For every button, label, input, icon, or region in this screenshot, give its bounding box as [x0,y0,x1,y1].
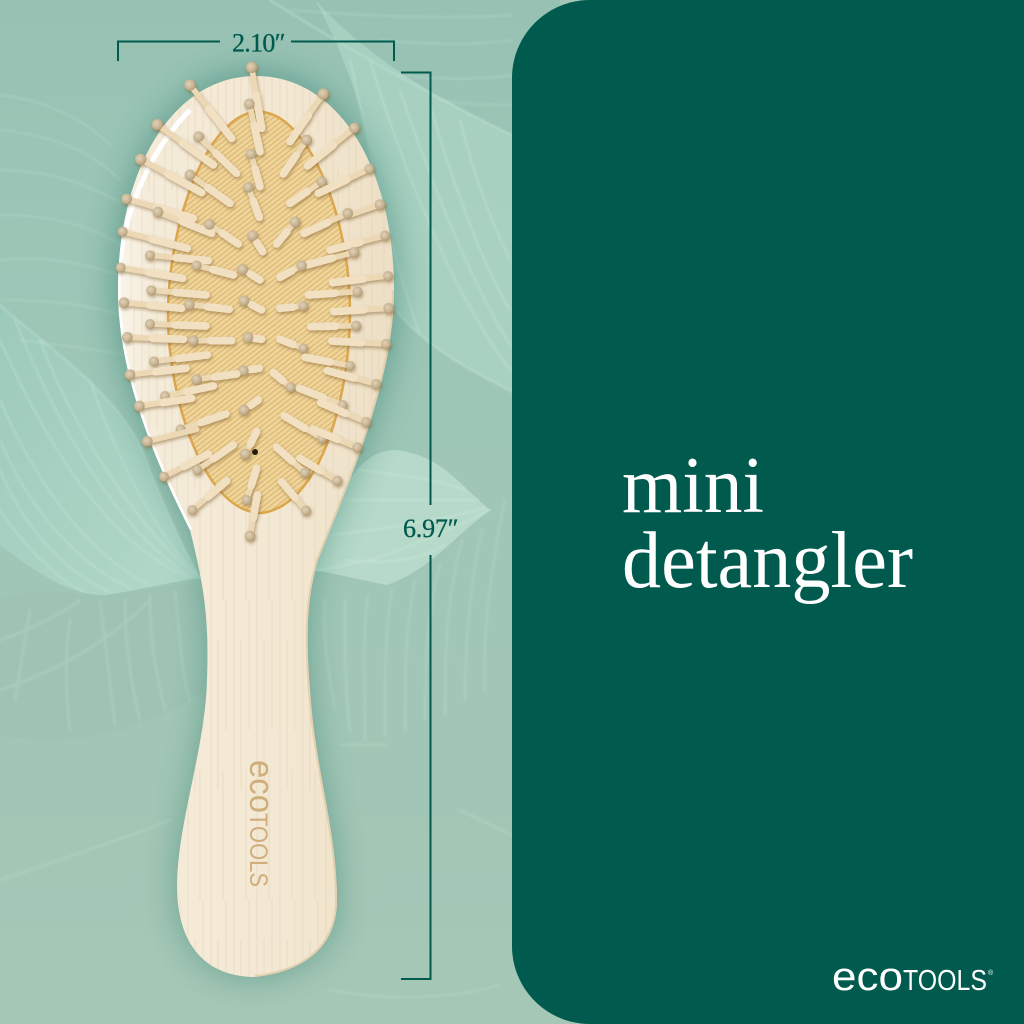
panel: dark green title panel [512,0,1024,1024]
height dimension 6.97 in: 6.97″ [403,514,458,543]
handle logo: eco [242,760,280,813]
width dimension 2.10 in [118,28,394,61]
brush drop shadow [112,70,400,977]
veins: upper streaks [0,10,512,355]
leaf: lower left shade [0,582,205,740]
logo: ecotools: ® [988,969,994,977]
leaf: top right [315,0,512,392]
veins: top right leaf [270,0,512,392]
width dimension 2.10 in: 2.10″ [232,28,285,58]
title: mini detangler: detangler [622,517,913,605]
brush [110,62,410,990]
height dimension 6.97 in [401,72,458,979]
veins: centre right leaf [315,470,490,570]
leaf: centre right [310,450,490,585]
handle logo [242,760,280,887]
cushion pad [168,112,350,513]
logo: ecotools: eco [832,955,903,999]
leaf veins [0,0,512,997]
veins: lower streaks [0,500,512,997]
handle logo: TOOLS [244,813,272,887]
logo: ecotools: TOOLS [903,965,987,997]
background: mint leaves [0,0,560,1024]
logo: ecotools [832,955,994,999]
pins [116,62,394,541]
brush body with handle [118,76,394,977]
leaf: large left [0,305,200,595]
veins: left leaf [0,305,200,592]
title: mini detangler: mini [622,442,764,530]
